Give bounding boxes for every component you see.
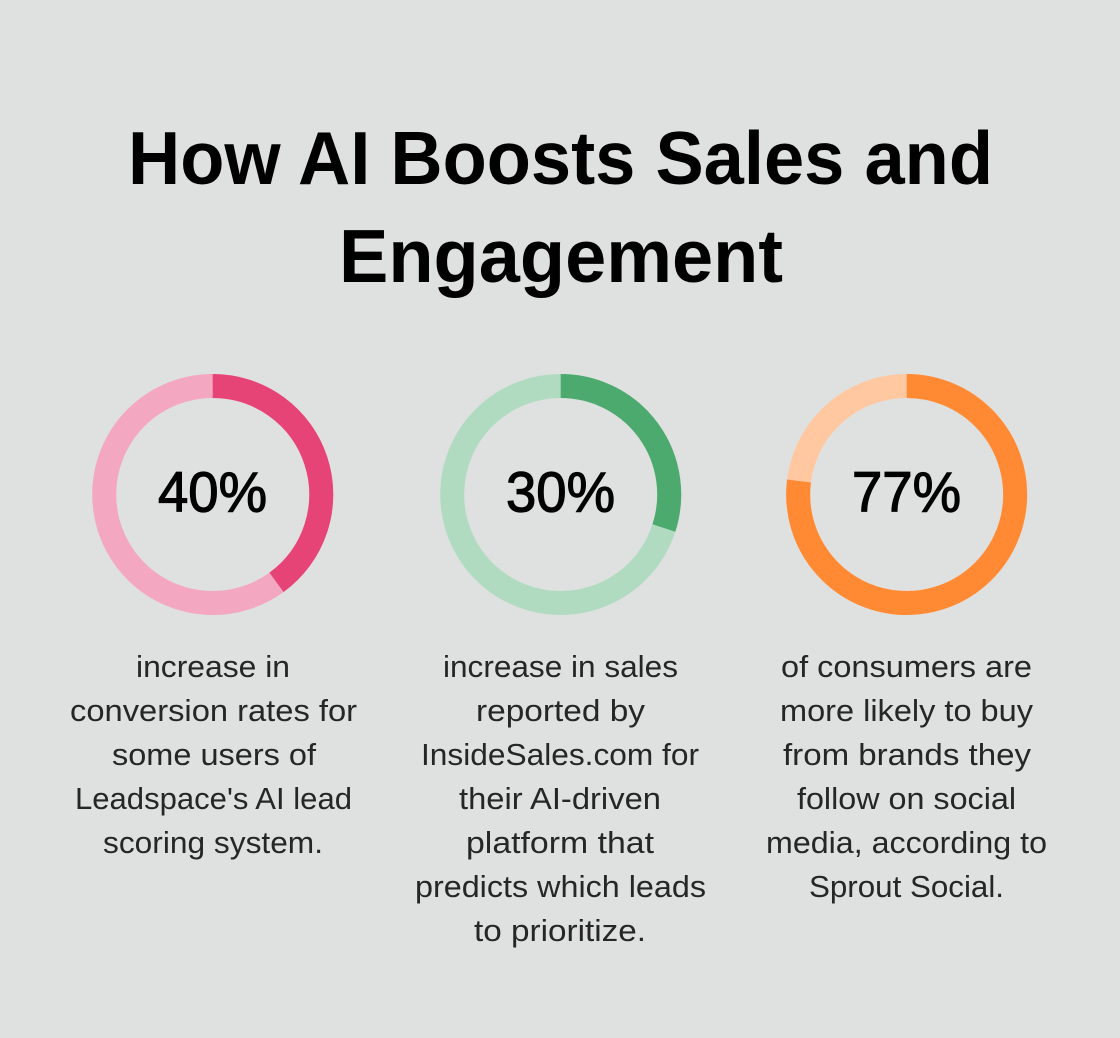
description: social media consumers: of consumers are xyxy=(781,649,1032,684)
description: social media consumers xyxy=(766,649,1047,904)
value: 40%: 40% xyxy=(158,460,267,524)
description: social media consumers: from brands they xyxy=(783,737,1032,772)
description: conversion rates: scoring system. xyxy=(103,825,323,860)
panel: 77% consumers stat xyxy=(766,386,1047,904)
description: sales increase: to prioritize. xyxy=(474,913,646,948)
title: How AI Boosts Sales and xyxy=(128,116,993,200)
description: sales increase: platform that xyxy=(466,825,654,860)
description: sales increase xyxy=(415,649,706,948)
description: sales increase: predicts which leads xyxy=(415,869,706,904)
description: conversion rates xyxy=(70,649,357,860)
value: 30%: 30% xyxy=(506,460,615,524)
description: conversion rates: some users of xyxy=(112,737,316,772)
title xyxy=(128,116,993,298)
description: social media consumers: follow on social xyxy=(797,781,1016,816)
title: Engagement xyxy=(339,214,783,298)
description: social media consumers: more likely to buy xyxy=(780,693,1034,728)
description: conversion rates: Leadspace's AI lead xyxy=(75,781,352,816)
donut chart: 40% xyxy=(104,386,321,603)
description: sales increase: InsideSales.com for xyxy=(421,737,699,772)
description: sales increase: increase in sales xyxy=(443,649,678,684)
description: sales increase: their AI-driven xyxy=(459,781,661,816)
description: conversion rates: conversion rates for xyxy=(70,693,357,728)
description: social media consumers: Sprout Social. xyxy=(809,869,1004,904)
description: social media consumers: media, according to xyxy=(766,825,1047,860)
description: conversion rates: increase in xyxy=(136,649,290,684)
panel: 40% conversion stat xyxy=(70,386,357,860)
description: sales increase: reported by xyxy=(476,693,646,728)
donut chart: 30% xyxy=(452,386,669,603)
value: 77%: 77% xyxy=(852,460,961,524)
panel: 30% sales stat xyxy=(415,386,706,948)
donut chart: 77% xyxy=(798,386,1015,603)
